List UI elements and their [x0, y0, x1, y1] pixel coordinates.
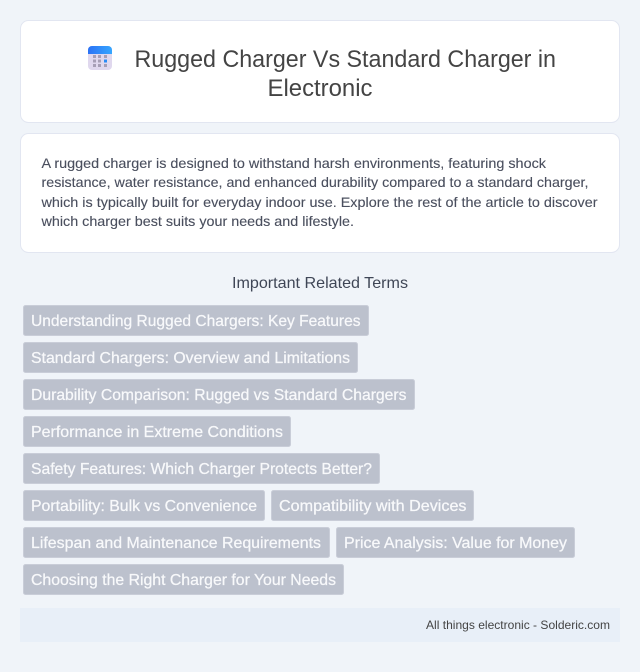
tag: durability comparison: Durability Comparison: Rugged vs Standard Chargers — [31, 387, 406, 404]
text block: summary: which charger best suits your needs and lifestyle. — [40, 213, 354, 229]
tag: lifespan — [24, 528, 330, 558]
tag: safety features — [24, 454, 380, 484]
icon: calendar — [88, 46, 112, 70]
tag: performance: Performance in Extreme Conditions — [31, 424, 283, 441]
tag: safety features: Safety Features: Which Charger Protects Better? — [31, 461, 372, 478]
text block: summary — [40, 155, 598, 229]
tag: price analysis: Price Analysis: Value for Money — [344, 535, 567, 552]
tag: lifespan: Lifespan and Maintenance Requirements — [31, 535, 321, 552]
panel: summary card — [20, 134, 620, 252]
tag: portability — [24, 490, 264, 520]
tag: choosing the right charger — [24, 564, 344, 594]
text block: summary: resistance, water resistance, and enhanced durability compared to a standard charger, — [42, 174, 588, 190]
panel: title card — [20, 20, 620, 122]
footer — [20, 608, 620, 642]
text block: summary: which is typically built for everyday indoor use. Explore the rest of the article to discover — [40, 194, 598, 210]
tag: price analysis — [336, 528, 574, 558]
tag: compatibility — [272, 490, 474, 520]
tag: portability: Portability: Bulk vs Convenience — [31, 498, 257, 515]
tag: compatibility: Compatibility with Devices — [279, 498, 466, 515]
tag: standard chargers: Standard Chargers: Overview and Limitations — [31, 350, 350, 367]
tag: standard chargers — [24, 342, 358, 372]
tag: understanding rugged chargers — [24, 306, 368, 336]
heading: important related terms: Important Related Terms — [232, 275, 408, 292]
title: Electronic — [268, 75, 372, 102]
tag: durability comparison — [24, 380, 414, 410]
title — [134, 46, 556, 102]
tag: understanding rugged chargers: Understanding Rugged Chargers: Key Features — [31, 313, 360, 330]
tag list — [24, 306, 574, 594]
tag: performance — [24, 416, 290, 446]
title: Rugged Charger Vs Standard Charger in — [134, 46, 556, 73]
text block: summary: A rugged charger is designed to withstand harsh environments, featuring shock — [42, 155, 547, 171]
footer: All things electronic - Solderic.com — [426, 618, 610, 632]
tag: choosing the right charger: Choosing the Right Charger for Your Needs — [31, 572, 336, 589]
